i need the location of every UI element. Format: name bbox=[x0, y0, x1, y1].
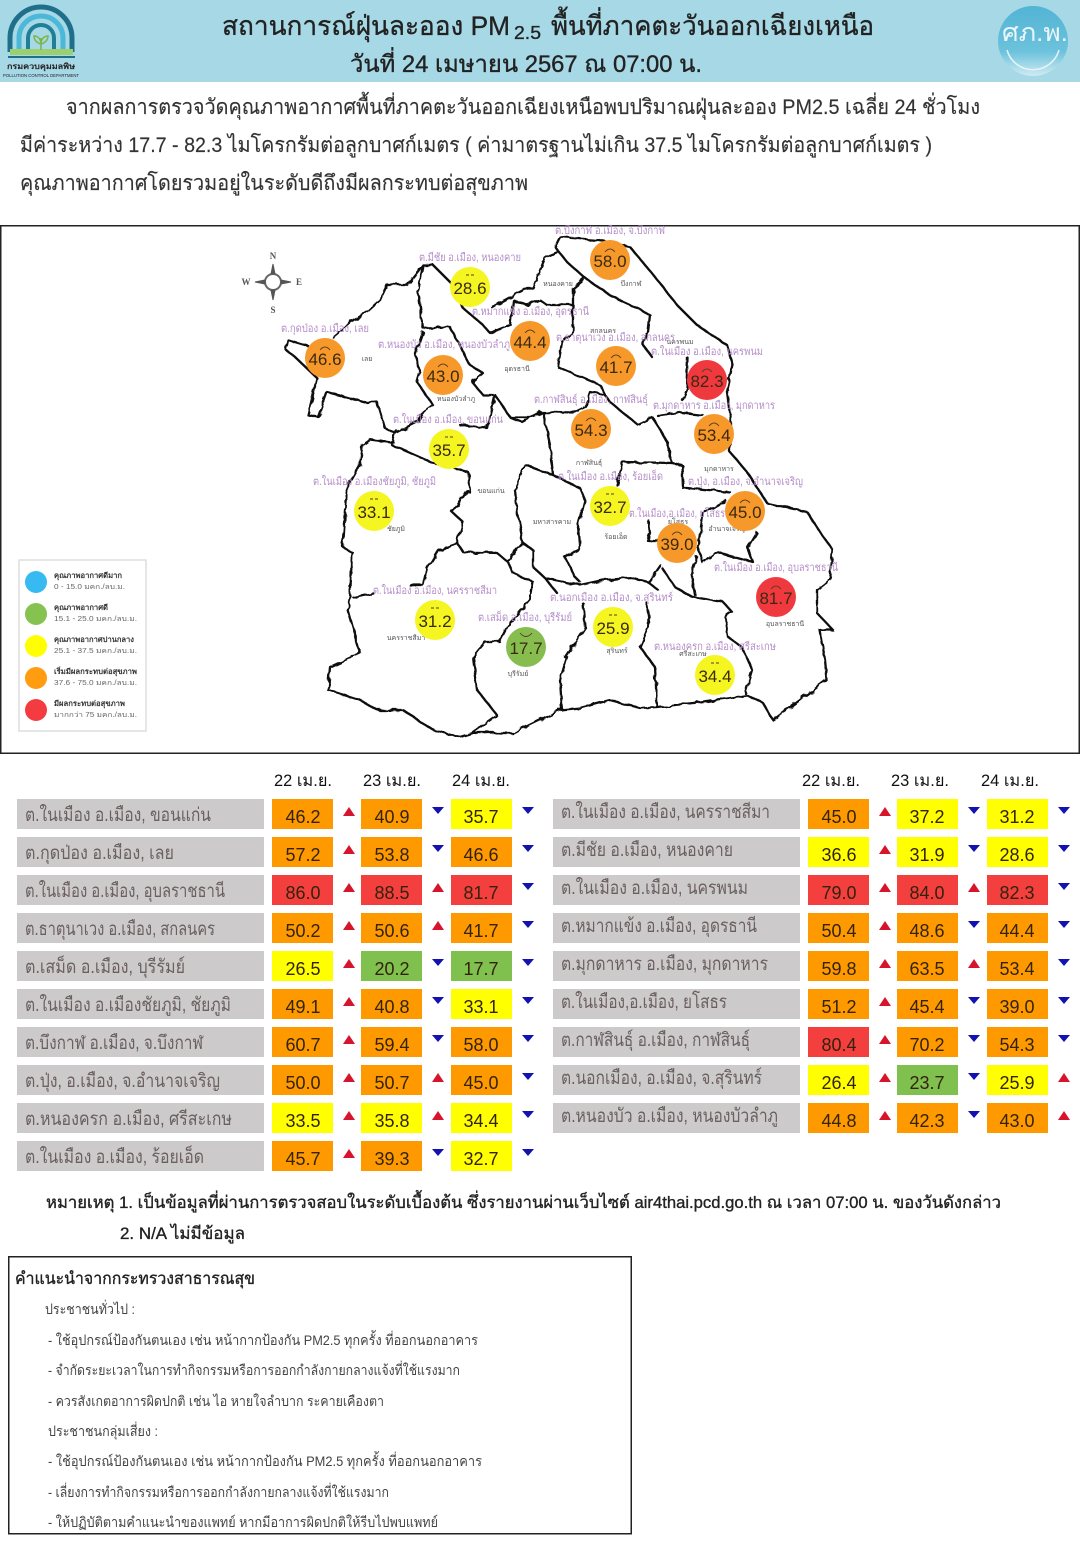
row: Sakon Nakhon: ต.ธาตุนาเวง อ.เมือง, สกลนคร bbox=[25, 919, 215, 941]
advice: at-risk groups: - ใช้อุปกรณ์ป้องกันตนเอง เช่น หน้ากากป้องกัน PM2.5 ทุกครั้ง ที่ออกนอกอาคาร bbox=[48, 1451, 482, 1470]
row: Bueng Kan: 59.4 bbox=[374, 1035, 410, 1055]
map: province names: นครพนม bbox=[666, 339, 694, 346]
map: province names: หนองคาย bbox=[543, 281, 573, 288]
footnotes bbox=[46, 1190, 1001, 1244]
marker: Yasothon 39.0 bbox=[657, 523, 697, 563]
legend: มากกว่า 75 มคก./ลบ.ม. bbox=[54, 712, 137, 719]
advice: at-risk groups: ประชาชนกลุ่มเสี่ยง : bbox=[48, 1422, 158, 1440]
legend: 15.1 - 25.0 มคก./ลบ.ม. bbox=[54, 616, 137, 623]
row: Si Sa Ket: 34.4 bbox=[463, 1111, 499, 1131]
row: Mukdahan: 63.5 bbox=[909, 959, 945, 979]
marker: Yasothon 39.0: 39.0 bbox=[660, 535, 694, 554]
marker: Kalasin 54.3 bbox=[571, 409, 611, 449]
row: Yasothon: 39.0 bbox=[999, 997, 1035, 1017]
legend: เริ่มมีผลกระทบต่อสุขภาพ bbox=[54, 665, 137, 676]
row: Udon Thani: 50.4 bbox=[821, 921, 857, 941]
map: province names: อุดรธานี bbox=[504, 365, 530, 373]
intro text block bbox=[20, 92, 980, 196]
row: Nakhon Phanom: 84.0 bbox=[909, 883, 945, 903]
legend: 25.1 - 37.5 มคก./ลบ.ม. bbox=[54, 648, 137, 655]
map: province names: ชัยภูมิ bbox=[387, 525, 405, 533]
legend: คุณภาพอากาศดีมาก bbox=[54, 571, 122, 580]
marker: Loei 46.6 bbox=[305, 338, 345, 378]
row: Nakhon Phanom: 79.0 bbox=[821, 883, 857, 903]
row: Surin: 23.7 bbox=[909, 1073, 945, 1093]
row: Roi Et: 45.7 bbox=[285, 1149, 321, 1169]
row: Bueng Kan bbox=[17, 1027, 534, 1057]
marker: Khon Kaen 35.7 bbox=[429, 429, 469, 469]
marker: Nong Khai 28.6: 28.6 bbox=[453, 279, 487, 298]
icon: right agency logo bbox=[998, 6, 1068, 76]
row: Udon Thani bbox=[553, 913, 1070, 943]
map: station labels: ต.หนองบัว อ.เมือง, หนองบัวลำภู bbox=[378, 338, 510, 351]
icon: pollution control department logo: กรมควบคุมมลพิษ bbox=[7, 62, 76, 72]
icon: compass: N bbox=[270, 251, 277, 261]
row: Nong Khai: ต.มีชัย อ.เมือง, หนองคาย bbox=[561, 839, 733, 861]
row: Buriram: 20.2 bbox=[374, 959, 410, 979]
marker: Buriram 17.7 bbox=[506, 627, 546, 667]
row: Kalasin: 80.4 bbox=[821, 1035, 857, 1055]
advice: general public bbox=[45, 1300, 478, 1409]
row: Mukdahan: 59.8 bbox=[821, 959, 857, 979]
map: province names: อุบลราชธานี bbox=[766, 620, 804, 628]
row: Surin bbox=[553, 1065, 1070, 1095]
marker: Nakhon Ratchasima 31.2 bbox=[415, 600, 455, 640]
map: station labels: ต.ปุ่ง, อ.เมือง, จ.อำนาจเจริญ bbox=[688, 475, 803, 488]
map: province names: สกลนคร bbox=[590, 328, 616, 335]
row: Surin: 26.4 bbox=[821, 1073, 857, 1093]
marker: Bueng Kan 58.0: 58.0 bbox=[593, 252, 627, 271]
marker: Amnat Charoen 45.0: 45.0 bbox=[728, 503, 762, 522]
table header: right dates: 24 เม.ย. bbox=[981, 771, 1039, 790]
map: province names: ร้อยเอ็ด bbox=[604, 532, 628, 541]
row: Mukdahan: ต.มุกดาหาร อ.เมือง, มุกดาหาร bbox=[561, 954, 768, 976]
legend: คุณภาพอากาศปานกลาง bbox=[54, 635, 134, 644]
row: Nong Khai: 28.6 bbox=[999, 845, 1035, 865]
row: Ubon Ratchathani: 81.7 bbox=[463, 883, 499, 903]
icon: compass: S bbox=[270, 305, 276, 315]
row: Nakhon Phanom: 82.3 bbox=[999, 883, 1035, 903]
row: Ubon Ratchathani: 88.5 bbox=[374, 883, 410, 903]
row: Bueng Kan: 58.0 bbox=[463, 1035, 499, 1055]
row: Amnat Charoen: ต.ปุ่ง, อ.เมือง, จ.อำนาจเจริญ bbox=[25, 1071, 220, 1093]
marker: Buriram 17.7: 17.7 bbox=[509, 639, 543, 658]
row: Loei: ต.กุดป่อง อ.เมือง, เลย bbox=[25, 843, 174, 865]
marker: Loei 46.6: 46.6 bbox=[308, 350, 342, 369]
map: station labels: ต.ธาตุนาเวง อ.เมือง, สกลนคร bbox=[556, 331, 675, 344]
row: Chaiyaphum bbox=[17, 989, 534, 1019]
row: Sakon Nakhon: 50.6 bbox=[374, 921, 410, 941]
row: Si Sa Ket bbox=[17, 1103, 534, 1133]
marker: Bueng Kan 58.0 bbox=[590, 240, 630, 280]
map: province names: ขอนแก่น bbox=[477, 488, 505, 495]
row: Ubon Ratchathani: ต.ในเมือง อ.เมือง, อุบลราชธานี bbox=[25, 880, 225, 903]
map: station labels: ต.หมากแข้ง อ.เมือง, อุดรธานี bbox=[472, 305, 589, 318]
marker: Surin 25.9: 25.9 bbox=[596, 619, 630, 638]
map: province names: มหาสารคาม bbox=[533, 519, 571, 526]
row: Nakhon Ratchasima bbox=[553, 799, 1070, 829]
row: Kalasin: 70.2 bbox=[909, 1035, 945, 1055]
map: station labels: ต.ในเมือง,อ.เมือง, ยโสธร bbox=[629, 506, 725, 520]
row: Mukdahan bbox=[553, 951, 1070, 981]
marker: Si Sa Ket 34.4 bbox=[695, 655, 735, 695]
row: Nakhon Ratchasima: 37.2 bbox=[909, 807, 945, 827]
map: station labels: ต.นอกเมือง อ.เมือง, จ.สุรินทร์ bbox=[550, 591, 673, 604]
title bbox=[222, 6, 874, 43]
map: station labels: ต.กุดป่อง อ.เมือง, เลย bbox=[281, 322, 369, 335]
row: Amnat Charoen: 50.7 bbox=[374, 1073, 410, 1093]
map: station labels: ต.เสม็ด อ.เมือง, บุรีรัมย์ bbox=[478, 610, 572, 624]
map: province names: เลย bbox=[362, 356, 372, 363]
advice: at-risk groups: - ให้ปฏิบัติตามคำแนะนำของแพทย์ หากมีอาการผิดปกติให้รีบไปพบแพทย์ bbox=[48, 1514, 438, 1530]
row: Khon Kaen: 40.9 bbox=[374, 807, 410, 827]
row: Khon Kaen: 46.2 bbox=[285, 807, 321, 827]
advice: general public: - ควรสังเกตอาการผิดปกติ เช่น ไอ หายใจลำบาก ระคายเคืองตา bbox=[48, 1393, 384, 1409]
panel: public health advice bbox=[9, 1257, 631, 1534]
marker: Udon Thani 44.4: 44.4 bbox=[513, 333, 547, 352]
row: Si Sa Ket: ต.หนองครก อ.เมือง, ศรีสะเกษ bbox=[25, 1108, 232, 1130]
marker: Nong Khai 28.6 bbox=[450, 267, 490, 307]
title: สถานการณ์ฝุ่นละออง PM bbox=[222, 10, 510, 43]
marker: Nong Bua Lamphu 43.0 bbox=[423, 355, 463, 395]
row: Roi Et: ต.ในเมือง อ.เมือง, ร้อยเอ็ด bbox=[25, 1144, 204, 1168]
row: Sakon Nakhon bbox=[17, 913, 534, 943]
legend: มีผลกระทบต่อสุขภาพ bbox=[54, 699, 125, 708]
row: Yasothon: ต.ในเมือง,อ.เมือง, ยโสธร bbox=[561, 990, 727, 1013]
row: Loei bbox=[17, 837, 534, 867]
icon: compass bbox=[242, 251, 302, 315]
map: station labels bbox=[281, 224, 838, 653]
legend bbox=[19, 560, 146, 731]
row: Bueng Kan: ต.บึงกาฬ อ.เมือง, จ.บึงกาฬ bbox=[25, 1033, 204, 1054]
row: Loei: 57.2 bbox=[285, 845, 321, 865]
icon: compass: E bbox=[296, 277, 302, 287]
row: Chaiyaphum: 33.1 bbox=[463, 997, 499, 1017]
map: station labels: ต.หนองครก อ.เมือง, ศรีสะเกษ bbox=[654, 640, 776, 653]
map: station labels: ต.ในเมือง อ.เมือง, ขอนแก่น bbox=[393, 413, 503, 426]
row: Ubon Ratchathani: 86.0 bbox=[285, 883, 321, 903]
advice: general public: ประชาชนทั่วไป : bbox=[45, 1300, 135, 1317]
row: Nakhon Ratchasima: 31.2 bbox=[999, 807, 1035, 827]
advice: general public: - ใช้อุปกรณ์ป้องกันตนเอง เช่น หน้ากากป้องกัน PM2.5 ทุกครั้ง ที่ออกนอกอาคาร bbox=[48, 1330, 478, 1349]
advice: general public: - จำกัดระยะเวลาในการทำกิจกรรมหรือการออกกำลังกายกลางแจ้งที่ใช้แรงมาก bbox=[48, 1361, 460, 1378]
row: Nong Bua Lamphu: 43.0 bbox=[999, 1111, 1035, 1131]
row: Buriram: 17.7 bbox=[463, 959, 499, 979]
map: station labels: ต.กาฬสินธุ์ อ.เมือง, กาฬสินธุ์ bbox=[534, 393, 648, 406]
map: station markers bbox=[305, 240, 796, 695]
table header: left dates: 24 เม.ย. bbox=[452, 771, 510, 790]
row: Loei: 46.6 bbox=[463, 845, 499, 865]
row: Nakhon Phanom: ต.ในเมือง อ.เมือง, นครพนม bbox=[561, 877, 748, 899]
row: Nong Bua Lamphu bbox=[553, 1103, 1070, 1133]
map: province names: บุรีรัมย์ bbox=[508, 670, 528, 678]
icon: compass: W bbox=[242, 277, 250, 287]
table header: left dates: 23 เม.ย. bbox=[363, 771, 421, 790]
marker: Si Sa Ket 34.4: 34.4 bbox=[698, 667, 732, 686]
marker: Mukdahan 53.4 bbox=[694, 414, 734, 454]
map: station labels: ต.ในเมือง อ.เมือง, อุบลราชธานี bbox=[714, 561, 838, 574]
map: province names: กาฬสินธุ์ bbox=[576, 459, 602, 467]
row: Buriram bbox=[17, 951, 534, 981]
row: Nakhon Phanom bbox=[553, 875, 1070, 905]
row: Nong Bua Lamphu: ต.หนองบัว อ.เมือง, หนองบัวลำภู bbox=[561, 1106, 778, 1127]
marker: Sakon Nakhon 41.7: 41.7 bbox=[599, 358, 633, 377]
row: Surin: 25.9 bbox=[999, 1073, 1035, 1093]
row: Surin: ต.นอกเมือง, อ.เมือง, จ.สุรินทร์ bbox=[561, 1067, 762, 1090]
intro text block: จากผลการตรวจวัดคุณภาพอากาศพื้นที่ภาคตะวันออกเฉียงเหนือพบปริมาณฝุ่นละออง PM2.5 เฉลี่ย 24 ชั่วโมง bbox=[66, 92, 980, 120]
row: Yasothon bbox=[553, 989, 1070, 1019]
map: province names: ศรีสะเกษ bbox=[679, 650, 707, 658]
intro text block: คุณภาพอากาศโดยรวมอยู่ในระดับดีถึงมีผลกระทบต่อสุขภาพ bbox=[20, 171, 528, 196]
row: Ubon Ratchathani bbox=[17, 875, 534, 905]
map: station labels: ต.บึงกาฬ อ.เมือง, จ.บึงกาฬ bbox=[555, 224, 665, 237]
intro text block: มีค่าระหว่าง 17.7 - 82.3 ไมโครกรัมต่อลูกบาศก์เมตร ( ค่ามาตรฐานไม่เกิน 37.5 ไมโครกรัมต่อลูกบาศก์เมตร ) bbox=[20, 133, 932, 158]
row: Nong Khai: 31.9 bbox=[909, 845, 945, 865]
row: Yasothon: 45.4 bbox=[909, 997, 945, 1017]
row: Si Sa Ket: 35.8 bbox=[374, 1111, 410, 1131]
row: Kalasin: ต.กาฬสินธุ์ อ.เมือง, กาฬสินธุ์ bbox=[561, 1029, 750, 1052]
marker: Chaiyaphum 33.1: 33.1 bbox=[357, 503, 391, 522]
row: Yasothon: 51.2 bbox=[821, 997, 857, 1017]
row: Sakon Nakhon: 41.7 bbox=[463, 921, 499, 941]
row: Kalasin bbox=[553, 1027, 1070, 1057]
row: Khon Kaen: ต.ในเมือง อ.เมือง, ขอนแก่น bbox=[25, 804, 211, 826]
marker: Roi Et 32.7 bbox=[590, 486, 630, 526]
panel: map frame bbox=[1, 224, 1079, 753]
icon: pollution control department logo bbox=[3, 7, 79, 78]
marker: Surin 25.9 bbox=[593, 607, 633, 647]
row: Amnat Charoen: 50.0 bbox=[285, 1073, 321, 1093]
icon: right agency logo: ศภ.พ. bbox=[1002, 19, 1068, 47]
map: province names: อำนาจเจริญ bbox=[708, 525, 746, 533]
map: province names: ยโสธร bbox=[668, 517, 688, 526]
icon: pollution control department logo: POLLUTION CONTROL DEPARTMENT bbox=[3, 73, 79, 78]
row: Chaiyaphum: ต.ในเมือง อ.เมืองชัยภูมิ, ชัยภูมิ bbox=[25, 994, 231, 1016]
row: Roi Et: 32.7 bbox=[463, 1149, 499, 1169]
map: province names bbox=[362, 279, 804, 678]
map: province names: บึงกาฬ bbox=[621, 279, 642, 288]
map: province boundaries bbox=[286, 237, 833, 737]
marker: Nakhon Phanom 82.3 bbox=[687, 360, 727, 400]
row: Roi Et: 39.3 bbox=[374, 1149, 410, 1169]
row: Nakhon Ratchasima: 45.0 bbox=[821, 807, 857, 827]
table header: right dates bbox=[802, 771, 1039, 790]
advice heading: คำแนะนำจากกระทรวงสาธารณสุข bbox=[15, 1269, 255, 1289]
table header: right dates: 22 เม.ย. bbox=[802, 771, 860, 790]
row: Nong Khai: 36.6 bbox=[821, 845, 857, 865]
marker: Ubon Ratchathani 81.7: 81.7 bbox=[759, 589, 793, 608]
marker: Khon Kaen 35.7: 35.7 bbox=[432, 441, 466, 460]
map: station labels: ต.มีชัย อ.เมือง, หนองคาย bbox=[419, 251, 521, 264]
map: province names: สุรินทร์ bbox=[606, 647, 628, 655]
row: Khon Kaen: 35.7 bbox=[463, 807, 499, 827]
map: station labels: ต.ในเมือง อ.เมือง, ร้อยเอ็ด bbox=[558, 469, 663, 483]
title: 2.5 bbox=[514, 23, 541, 43]
table header: right dates: 23 เม.ย. bbox=[891, 771, 949, 790]
map: station labels: ต.ในเมือง อ.เมือง, นครราชสีมา bbox=[373, 584, 497, 597]
header banner bbox=[0, 0, 1080, 82]
legend: 0 - 15.0 มคก./ลบ.ม. bbox=[54, 584, 125, 591]
row: Roi Et bbox=[17, 1141, 534, 1171]
marker: Kalasin 54.3: 54.3 bbox=[574, 421, 608, 440]
row: Udon Thani: 44.4 bbox=[999, 921, 1035, 941]
map: province names: หนองบัวลำภู bbox=[437, 395, 475, 403]
table header: left dates: 22 เม.ย. bbox=[274, 771, 332, 790]
table: right station readings bbox=[553, 771, 1070, 1133]
footnotes: 2. N/A ไม่มีข้อมูล bbox=[120, 1223, 245, 1244]
row: Nong Bua Lamphu: 42.3 bbox=[909, 1111, 945, 1131]
marker: Nakhon Phanom 82.3: 82.3 bbox=[690, 372, 724, 391]
row: Buriram: 26.5 bbox=[285, 959, 321, 979]
marker: Amnat Charoen 45.0 bbox=[725, 491, 765, 531]
date subtitle: วันที่ 24 เมษายน 2567 ณ 07:00 น. bbox=[350, 47, 702, 78]
table: left station readings bbox=[17, 771, 534, 1171]
marker: Nakhon Ratchasima 31.2: 31.2 bbox=[418, 612, 452, 631]
footnotes: หมายเหตุ 1. เป็นข้อมูลที่ผ่านการตรวจสอบในระดับเบื้องต้น ซึ่งรายงานผ่านเว็บไซต์ air4thai.pcd.go.th ณ เวลา 07:00 น. ของวันดังกล่าว bbox=[46, 1190, 1001, 1213]
row: Khon Kaen bbox=[17, 799, 534, 829]
row: Nong Bua Lamphu: 44.8 bbox=[821, 1111, 857, 1131]
marker: Nong Bua Lamphu 43.0: 43.0 bbox=[426, 367, 460, 386]
row: Udon Thani: 48.6 bbox=[909, 921, 945, 941]
legend: 37.6 - 75.0 มคก./ลบ.ม. bbox=[54, 680, 137, 687]
row: Chaiyaphum: 40.8 bbox=[374, 997, 410, 1017]
row: Amnat Charoen: 45.0 bbox=[463, 1073, 499, 1093]
map: station labels: ต.ในเมือง อ.เมืองชัยภูมิ, ชัยภูมิ bbox=[313, 475, 436, 488]
row: Nakhon Ratchasima: ต.ในเมือง อ.เมือง, นครราชสีมา bbox=[561, 801, 770, 823]
map: station labels: ต.มุกดาหาร อ.เมือง, มุกดาหาร bbox=[653, 399, 775, 412]
marker: Udon Thani 44.4 bbox=[510, 321, 550, 361]
row: Udon Thani: ต.หมากแข้ง อ.เมือง, อุดรธานี bbox=[561, 915, 757, 938]
row: Chaiyaphum: 49.1 bbox=[285, 997, 321, 1017]
row: Buriram: ต.เสม็ด อ.เมือง, บุรีรัมย์ bbox=[25, 954, 185, 979]
map: province names: นครราชสีมา bbox=[387, 634, 425, 642]
marker: Roi Et 32.7: 32.7 bbox=[593, 498, 627, 517]
row: Amnat Charoen bbox=[17, 1065, 534, 1095]
row: Sakon Nakhon: 50.2 bbox=[285, 921, 321, 941]
row: Mukdahan: 53.4 bbox=[999, 959, 1035, 979]
marker: Ubon Ratchathani 81.7 bbox=[756, 577, 796, 617]
table header: left dates bbox=[274, 771, 510, 790]
legend: คุณภาพอากาศดี bbox=[54, 603, 108, 612]
advice: at-risk groups bbox=[48, 1422, 482, 1530]
marker: Chaiyaphum 33.1 bbox=[354, 491, 394, 531]
marker: Mukdahan 53.4: 53.4 bbox=[697, 426, 731, 445]
row: Loei: 53.8 bbox=[374, 845, 410, 865]
map: province names: มุกดาหาร bbox=[704, 466, 734, 473]
map: station labels: ต.ในเมือง อ.เมือง, นครพนม bbox=[651, 345, 763, 358]
marker: Sakon Nakhon 41.7 bbox=[596, 346, 636, 386]
row: Bueng Kan: 60.7 bbox=[285, 1035, 321, 1055]
title: พื้นที่ภาคตะวันออกเฉียงเหนือ bbox=[551, 6, 874, 41]
row: Nong Khai bbox=[553, 837, 1070, 867]
row: Si Sa Ket: 33.5 bbox=[285, 1111, 321, 1131]
advice: at-risk groups: - เลี่ยงการทำกิจกรรมหรือการออกกำลังกายกลางแจ้งที่ใช้แรงมาก bbox=[48, 1483, 389, 1500]
row: Kalasin: 54.3 bbox=[999, 1035, 1035, 1055]
